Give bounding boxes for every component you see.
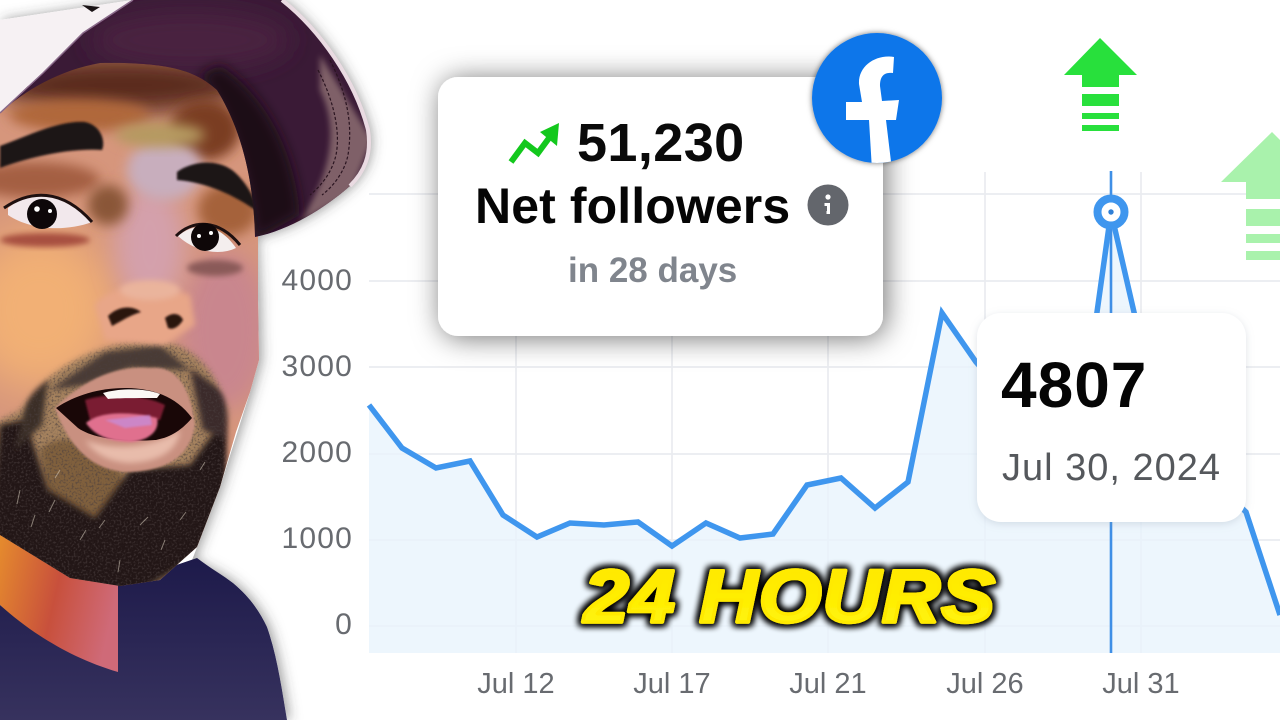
panel: date tooltip [977, 313, 1246, 522]
y axis labels: 3000 [281, 350, 353, 383]
right eye [176, 223, 240, 252]
shirt [0, 558, 287, 720]
skin base [0, 50, 270, 590]
cap brim pale edge [282, 0, 369, 186]
x axis labels: Jul 31 [1102, 668, 1180, 700]
y axis labels: 2000 [281, 436, 353, 469]
follower count: 51,230 [577, 113, 745, 173]
cap brim left edge [0, 0, 133, 113]
left eye [4, 195, 92, 229]
mouth [55, 368, 195, 472]
panel: net followers card [438, 77, 883, 336]
y axis labels: 0 [335, 608, 353, 641]
y axis labels: 1000 [281, 522, 353, 555]
icon: facebook logo [812, 33, 942, 170]
icon: info [808, 184, 848, 226]
follower trend line [369, 212, 1280, 615]
x axis labels: Jul 17 [633, 668, 711, 700]
tooltip value: 4807 [1001, 349, 1147, 421]
cap [0, 0, 380, 240]
x axis labels: Jul 21 [789, 668, 867, 700]
area fill under line [369, 212, 1280, 653]
x axis labels: Jul 12 [477, 668, 555, 700]
headline: 24 HOURS: 24 HOURS [582, 556, 996, 638]
nose [95, 280, 195, 345]
eyebrows [0, 122, 258, 212]
icon: green trend arrow [511, 123, 559, 162]
selected day cursor line [1110, 171, 1112, 653]
icon: bright green up arrow [1064, 38, 1137, 131]
cap brim underside [0, 0, 380, 240]
x axis labels: Jul 26 [946, 668, 1024, 700]
tooltip date: Jul 30, 2024 [1002, 447, 1221, 489]
person silhouette shadow [0, 0, 369, 720]
chart gridlines [369, 172, 1280, 653]
face [0, 50, 270, 600]
y axis labels [281, 264, 353, 641]
beard [0, 341, 232, 586]
cap button [82, 5, 100, 12]
x axis labels [477, 668, 1180, 700]
card label: Net followers [475, 178, 790, 234]
cap crown [0, 0, 133, 113]
icon: pale green up arrow [1221, 132, 1280, 260]
cheek and forehead shading [0, 57, 270, 410]
neck [0, 510, 125, 674]
selected point marker [1098, 198, 1124, 226]
person: surprised man in cap [0, 0, 380, 720]
time period: in 28 days [568, 251, 737, 290]
chart: net followers by day [281, 171, 1280, 700]
y axis labels: 4000 [281, 264, 353, 297]
